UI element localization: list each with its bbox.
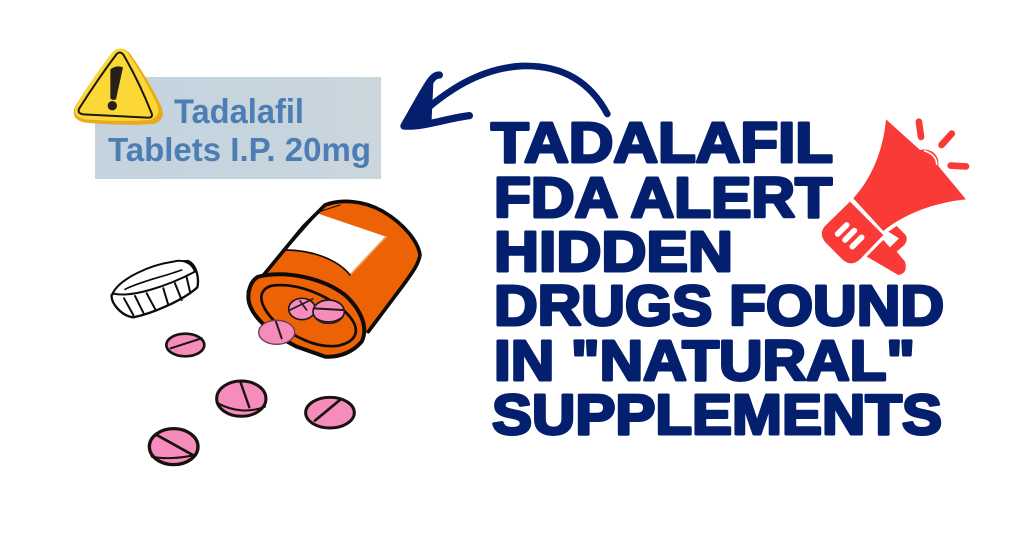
bottle cap xyxy=(112,261,198,317)
title xyxy=(491,111,944,447)
icon: red megaphone xyxy=(822,118,969,275)
title: IN "NATURAL" xyxy=(494,329,915,393)
pill 2 xyxy=(217,381,266,416)
title: FDA ALERT xyxy=(494,166,832,230)
pills inside bottle xyxy=(259,298,344,344)
title: DRUGS FOUND xyxy=(494,274,944,338)
label text: Tadalafil: Tadalafil xyxy=(174,93,304,131)
scattered pills xyxy=(149,334,354,465)
megaphone cone xyxy=(853,118,969,231)
illustration: spilled pill bottle xyxy=(112,200,420,465)
title: HIDDEN xyxy=(494,220,733,284)
title: SUPPLEMENTS xyxy=(492,383,942,447)
megaphone handle xyxy=(822,202,907,275)
label text: Tablets I.P. 20mg: Tablets I.P. 20mg xyxy=(108,131,371,168)
pill 4 xyxy=(149,429,198,465)
icon: warning triangle xyxy=(74,48,163,125)
pill 3 xyxy=(306,397,354,428)
panel: drug label xyxy=(95,77,381,179)
title: TADALAFIL xyxy=(491,111,833,175)
arrow: pointing to label xyxy=(404,66,607,126)
pill 1 xyxy=(166,334,204,356)
bottle body xyxy=(248,200,420,357)
